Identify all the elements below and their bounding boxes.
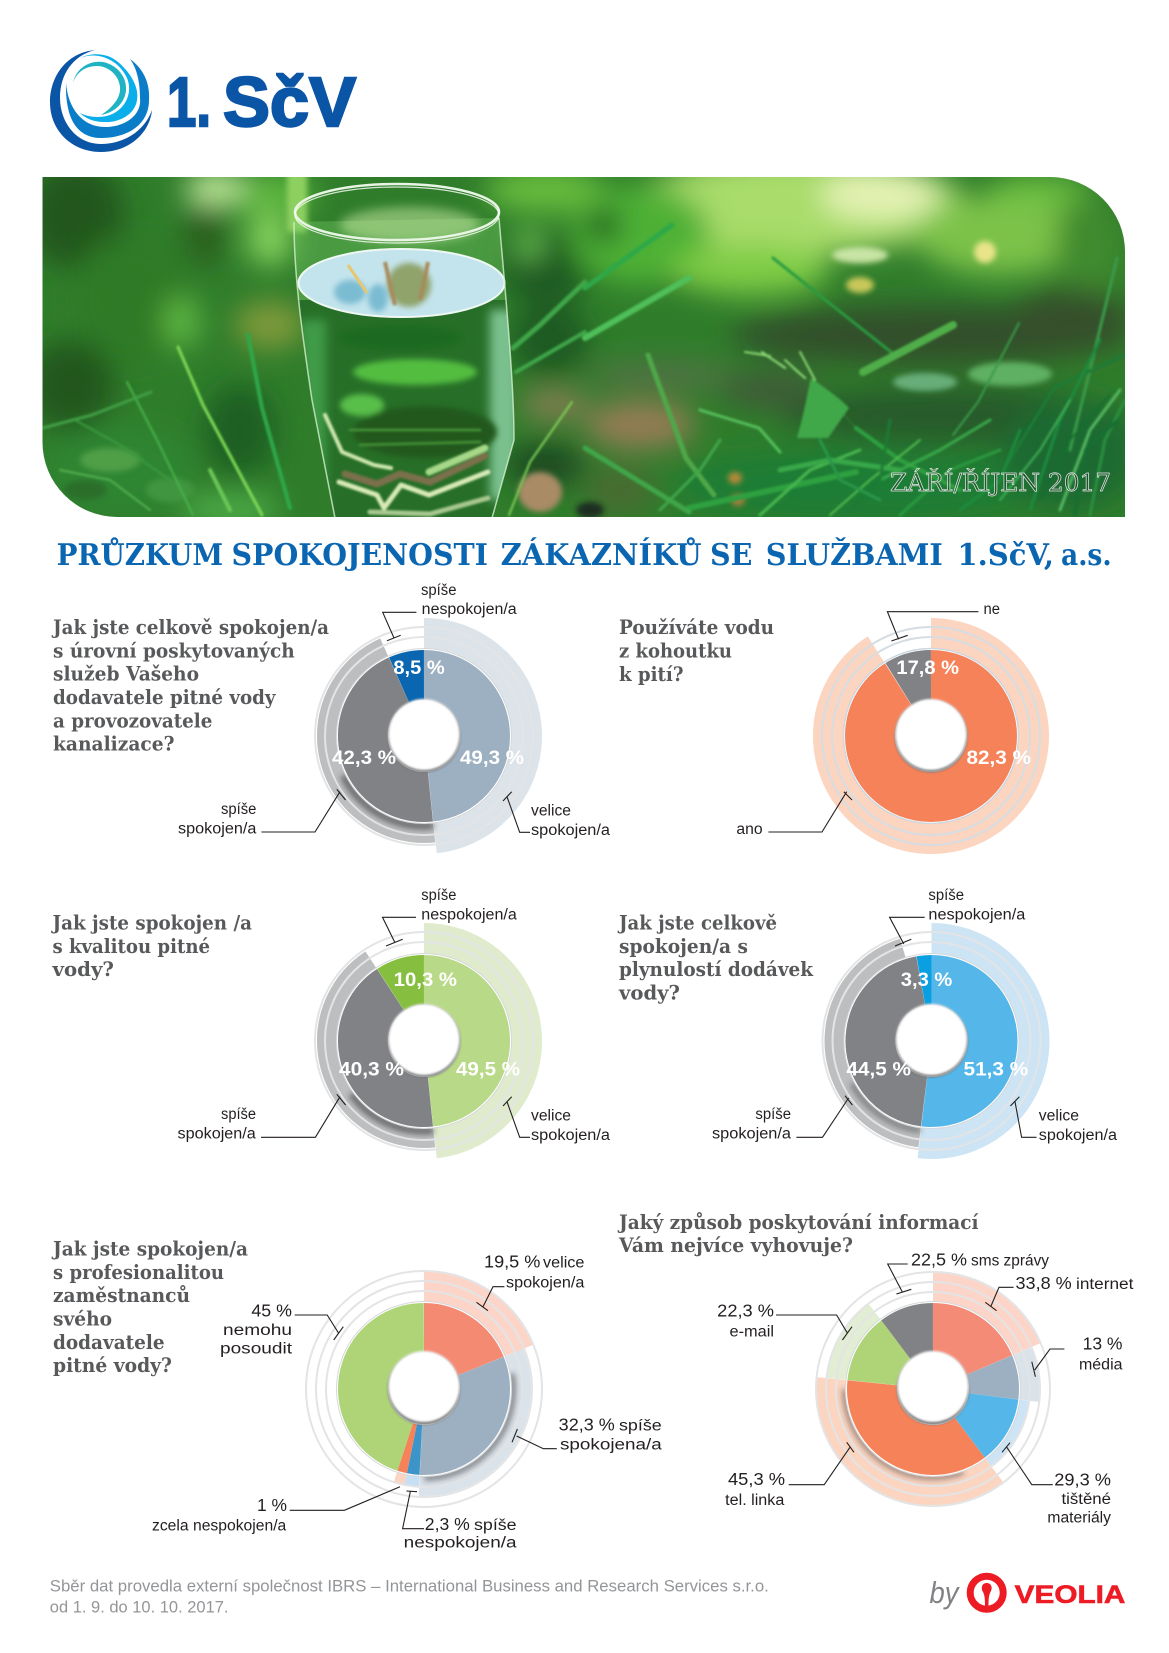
question: s úrovní poskytovaných: [53, 638, 295, 662]
callout: 22,3 % e-mail: [717, 1301, 852, 1341]
question: [51, 910, 252, 981]
callout: 32,3 % spíše spokojena/a: spokojena/a: [560, 1436, 662, 1453]
callout: 2,3 % spíše nespokojen/a: 2,3 %: [425, 1514, 470, 1534]
value labels: [339, 970, 520, 1081]
question: [51, 1236, 248, 1377]
callout: spíše spokojen/a: spíše: [755, 1106, 791, 1123]
donut chart: [315, 627, 533, 845]
panel: staff professionalism: [51, 1236, 662, 1552]
question: plynulostí dodávek: [619, 957, 814, 981]
callout: 22,5 % sms zprávy: 22,5 %: [911, 1249, 967, 1269]
question: vody?: [618, 980, 680, 1004]
callout: 19,5 % velice spokojen/a: spokojen/a: [506, 1274, 585, 1291]
question: Vám nejvíce vyhovuje?: [618, 1233, 853, 1257]
callout: 45 % nemohu posoudit: 45 %: [251, 1301, 292, 1321]
question: dodavatele: [53, 1330, 165, 1354]
callout: velice spokojen/a: spokojen/a: [531, 1127, 610, 1144]
icon: water swirl: [50, 50, 152, 152]
callout: 19,5 % velice spokojen/a: velice: [543, 1254, 584, 1271]
value labels: 42,3 %: [332, 748, 396, 769]
callout: 45 % nemohu posoudit: posoudit: [220, 1340, 293, 1357]
photo: glass of water in grass: [42, 177, 1125, 517]
callout: 32,3 % spíše spokojena/a: [512, 1415, 662, 1453]
footer note: Sběr dat provedla externí společnost IBRS – International Business and Research Services s.r.o.: [50, 1577, 769, 1596]
callout: 13 % média: 13 %: [1083, 1333, 1122, 1353]
callout: spíše spokojen/a: spokojen/a: [712, 1125, 791, 1142]
callout: 45,3 % tel. linka: tel. linka: [725, 1492, 785, 1509]
callout: 45,3 % tel. linka: [725, 1442, 854, 1509]
donut chart: [298, 1263, 550, 1515]
callout: 19,5 % velice spokojen/a: 19,5 %: [484, 1251, 540, 1271]
logo: 1.SčV: [50, 50, 356, 152]
callout: spíše spokojen/a: spokojen/a: [178, 1125, 256, 1142]
icon: Veolia drop: [970, 1576, 1003, 1609]
question: dodavatele pitné vody: [53, 685, 277, 709]
callout: spíše nespokojen/a: nespokojen/a: [422, 601, 517, 618]
callout: 19,5 % velice spokojen/a: [476, 1251, 585, 1311]
glass: [294, 184, 518, 525]
callout: spíše nespokojen/a: spíše: [421, 582, 456, 599]
panel: information channel: [617, 1210, 1134, 1532]
question: zaměstnanců: [53, 1283, 190, 1307]
callout: velice spokojen/a: velice: [531, 803, 571, 820]
callout: spíše nespokojen/a: spíše: [928, 887, 964, 904]
value labels: [896, 658, 1031, 769]
question: a provozovatele: [53, 708, 212, 732]
value labels: 51,3 %: [964, 1060, 1028, 1081]
callout: 45 % nemohu posoudit: [220, 1301, 343, 1357]
question: Jak jste celkově spokojen/a: [51, 615, 329, 639]
donut chart: [822, 627, 1040, 845]
callout: spíše spokojen/a: spíše: [221, 801, 256, 818]
callout: 32,3 % spíše spokojena/a: spíše: [619, 1418, 662, 1435]
callout: 2,3 % spíše nespokojen/a: [403, 1491, 517, 1552]
callout: spíše spokojen/a: [178, 789, 346, 837]
callout: 2,3 % spíše nespokojen/a: spíše: [474, 1517, 517, 1534]
title: 1.SčV,: [957, 538, 1054, 573]
callout: ano: ano: [736, 821, 763, 838]
question: spokojen/a s: [619, 934, 748, 958]
callout: velice spokojen/a: [1010, 1097, 1117, 1144]
logo: by Veolia: VEOLIA: [1015, 1581, 1125, 1609]
value labels: 40,3 %: [339, 1060, 404, 1081]
title: PRŮZKUM: [57, 536, 223, 573]
value labels: 17,8 %: [896, 658, 959, 679]
callout: 22,3 % e-mail: e-mail: [730, 1324, 774, 1341]
logo wordmark: SčV: [223, 63, 356, 141]
callout: velice spokojen/a: spokojen/a: [1039, 1127, 1117, 1144]
callout: spíše spokojen/a: [712, 1096, 852, 1142]
question: [51, 615, 329, 756]
value labels: 44,5 %: [846, 1060, 911, 1081]
callout: spíše nespokojen/a: [382, 887, 517, 946]
value labels: 82,3 %: [966, 748, 1031, 769]
callout: spíše nespokojen/a: nespokojen/a: [928, 906, 1026, 923]
date label: ZÁŘÍ/ŘÍJEN 2017: [890, 468, 1111, 497]
question: [619, 615, 774, 686]
title: a.s.: [1061, 538, 1112, 573]
question: pitné vody?: [53, 1353, 172, 1377]
callout: 45,3 % tel. linka: 45,3 %: [728, 1469, 785, 1489]
value labels: 3,3 %: [901, 970, 952, 991]
callout: 33,8 % internet: [985, 1273, 1134, 1311]
question: [617, 1210, 979, 1257]
question: s kvalitou pitné: [52, 934, 210, 958]
callout: velice spokojen/a: spokojen/a: [531, 822, 610, 839]
question: [617, 910, 814, 1004]
callout: 29,3 % tištěné materiály: 29,3 %: [1054, 1470, 1111, 1490]
callout: 1 % zcela nespokojen/a: [152, 1487, 400, 1535]
callout: 33,8 % internet: 33,8 %: [1016, 1273, 1072, 1293]
value labels: [846, 970, 1028, 1081]
value labels: 8,5 %: [393, 658, 445, 679]
value labels: [332, 658, 524, 769]
question: Jak jste celkově: [617, 910, 777, 934]
question: s profesionalitou: [53, 1260, 224, 1284]
panel: tap water use: [619, 601, 1040, 845]
callout: 2,3 % spíše nespokojen/a: nespokojen/a: [404, 1535, 517, 1552]
question: k pití?: [619, 662, 684, 686]
callout: 13 % média: [1032, 1333, 1123, 1377]
question: služeb Vašeho: [53, 662, 199, 686]
callout: 29,3 % tištěné materiály: tištěné: [1062, 1491, 1111, 1508]
callout: 13 % média: média: [1079, 1356, 1123, 1373]
grass blades: [43, 225, 1125, 515]
value labels: 49,3 %: [460, 748, 524, 769]
callout: velice spokojen/a: [503, 792, 610, 839]
callout: 22,5 % sms zprávy: [888, 1249, 1049, 1294]
question: svého: [53, 1306, 112, 1330]
question: kanalizace?: [53, 732, 174, 756]
footer note: od 1. 9. do 10. 10. 2017.: [50, 1598, 228, 1617]
callout: 32,3 % spíše spokojena/a: 32,3 %: [559, 1415, 615, 1435]
title: [57, 536, 1112, 573]
water surface: [298, 249, 504, 317]
donut chart: [822, 932, 1040, 1150]
question: Jak jste spokojen/a: [51, 1236, 248, 1260]
question: Jak jste spokojen /a: [51, 910, 252, 934]
callout: 22,5 % sms zprávy: sms zprávy: [971, 1252, 1049, 1269]
panel: overall satisfaction: [51, 582, 610, 845]
callout: 33,8 % internet: internet: [1076, 1276, 1134, 1293]
value labels: 49,5 %: [456, 1060, 520, 1081]
callout: ne: ne: [984, 601, 1000, 618]
callout: ne: [887, 601, 1000, 641]
logo: by Veolia: [930, 1575, 1125, 1610]
donut chart: [315, 932, 533, 1150]
callout: 22,3 % e-mail: 22,3 %: [717, 1301, 774, 1321]
question: Používáte vodu: [619, 615, 774, 639]
callout: spíše spokojen/a: spíše: [221, 1106, 256, 1123]
value labels: 10,3 %: [394, 970, 457, 991]
title: SE: [710, 538, 752, 573]
title: SLUŽBAMI: [766, 537, 943, 573]
title: SPOKOJENOSTI: [232, 538, 488, 573]
callout: velice spokojen/a: velice: [1039, 1108, 1079, 1125]
callout: spíše spokojen/a: spokojen/a: [178, 820, 257, 837]
callout: 1 % zcela nespokojen/a: zcela nespokojen/a: [152, 1518, 287, 1535]
callout: spíše nespokojen/a: spíše: [421, 887, 456, 904]
question: z kohoutku: [619, 638, 732, 662]
panel: water quality: [51, 887, 610, 1150]
callout: spíše spokojen/a: [178, 1094, 346, 1142]
panel: supply continuity: [617, 887, 1117, 1150]
donut chart: [790, 1246, 1076, 1532]
title: ZÁKAZNÍKŮ: [501, 536, 702, 573]
callout: spíše nespokojen/a: [383, 582, 517, 641]
logo wordmark: [167, 63, 356, 141]
callout: velice spokojen/a: [503, 1097, 610, 1144]
callout: ano: [736, 792, 852, 838]
callout: 29,3 % tištěné materiály: materiály: [1047, 1509, 1111, 1526]
callout: spíše nespokojen/a: nespokojen/a: [421, 906, 517, 923]
callout: velice spokojen/a: velice: [531, 1108, 571, 1125]
logo: by Veolia: by: [930, 1575, 961, 1610]
callout: 45 % nemohu posoudit: nemohu: [223, 1322, 292, 1339]
question: vody?: [52, 957, 114, 981]
footer note: [50, 1577, 769, 1617]
question: Jaký způsob poskytování informací: [617, 1210, 979, 1234]
callout: 29,3 % tištěné materiály: [1002, 1443, 1111, 1526]
callout: 1 % zcela nespokojen/a: 1 %: [257, 1495, 287, 1515]
logo wordmark: 1.: [167, 63, 211, 141]
callout: spíše nespokojen/a: [890, 887, 1026, 946]
